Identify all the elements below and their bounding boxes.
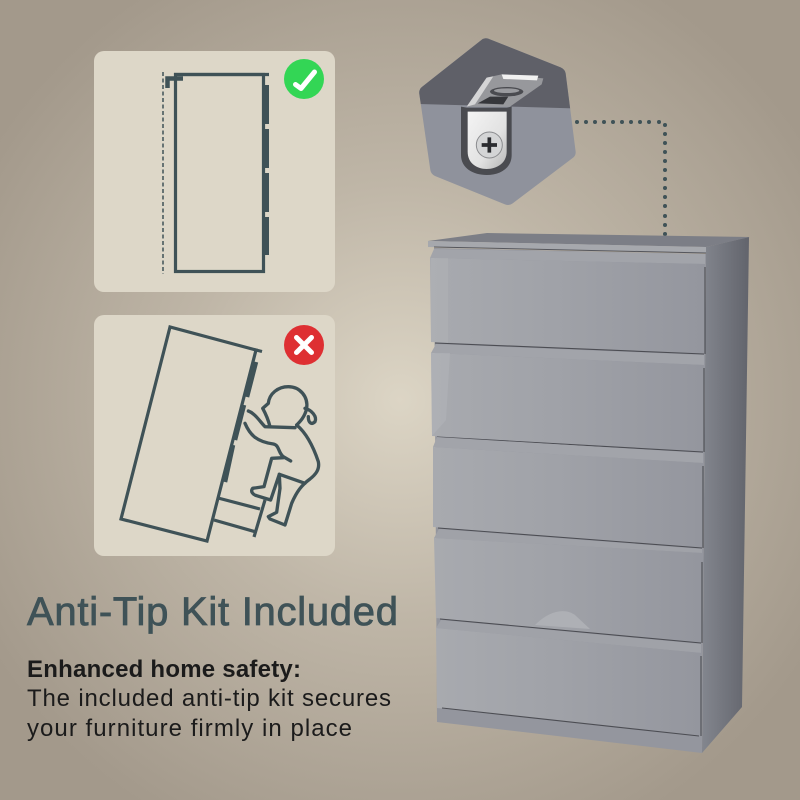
text block: safety description: your furniture firmly in place [27,715,352,742]
title: Anti-Tip Kit Included [27,590,398,634]
icon: tipping cabinet diagram [121,327,265,541]
icon: hexagon bracket close-up [419,38,576,205]
panel: wrong tipping cabinet [94,315,335,556]
dotted connector [575,120,667,236]
icon: secured cabinet diagram [163,72,269,274]
text block: safety description: The included anti-tip kit secures [27,685,391,712]
chest of drawers [428,233,750,753]
icon: red cross badge [284,325,324,365]
text block: safety description [27,656,391,742]
icon: climbing child [245,387,319,525]
drawer 4 [434,529,702,643]
drawer 2 [431,344,704,452]
drawer 3 [433,437,703,548]
panel: correct secured cabinet [94,51,335,292]
drawer 1 [430,249,705,354]
icon: green check badge [284,59,324,99]
drawer 5 [436,620,702,736]
text block: safety description: Enhanced home safety: [27,656,301,683]
